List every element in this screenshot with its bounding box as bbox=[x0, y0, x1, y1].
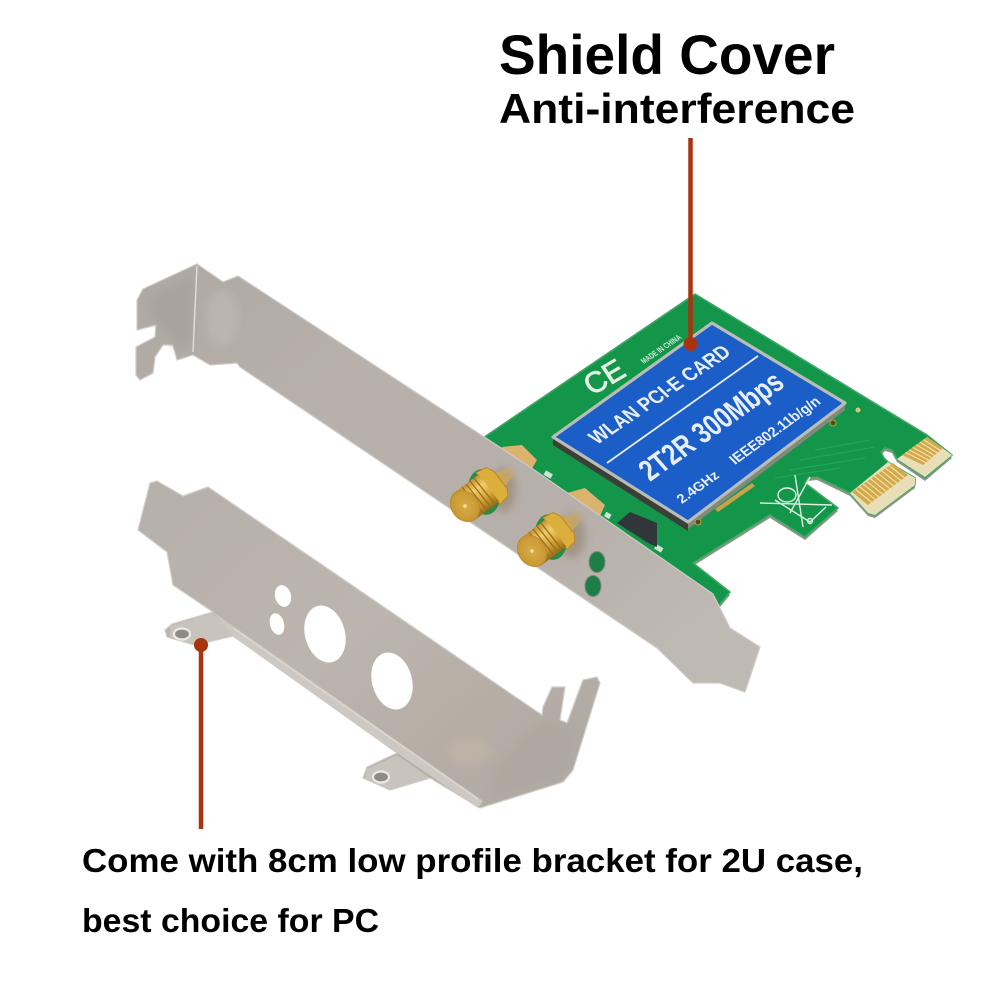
cover text: IEEE802.11b/g/n bbox=[726, 394, 824, 468]
leader line bbox=[199, 645, 203, 829]
PCIe wireless card bbox=[480, 294, 952, 613]
leader line bbox=[688, 138, 693, 344]
antenna cut-outs bbox=[464, 467, 571, 562]
full-height bracket bbox=[136, 264, 760, 692]
CE mark: CE bbox=[578, 353, 632, 402]
bottom fold strip bbox=[213, 612, 483, 808]
leader dot bbox=[684, 337, 698, 351]
gold contact fingers bbox=[850, 437, 952, 515]
black component bbox=[617, 512, 657, 547]
low profile plate bbox=[138, 481, 600, 808]
LED holes bbox=[585, 552, 605, 596]
green circuit board bbox=[480, 294, 952, 610]
subheading: Anti-interference bbox=[499, 85, 855, 132]
board details bbox=[544, 408, 860, 553]
leader dot bbox=[194, 638, 208, 652]
low profile bracket bbox=[138, 481, 600, 808]
bracket holes bbox=[267, 583, 419, 714]
cover text bbox=[584, 341, 824, 506]
cover text: 2T2R 300Mbps bbox=[632, 365, 791, 487]
connector shadows bbox=[490, 468, 585, 558]
gold edge strip bbox=[715, 483, 755, 512]
heading: Shield Cover bbox=[499, 23, 835, 86]
bracket plate bbox=[136, 264, 760, 692]
fold highlight bbox=[233, 628, 478, 799]
cover text: WLAN PCI-E CARD bbox=[584, 341, 736, 448]
caption line 2: best choice for PC bbox=[82, 902, 379, 939]
caption line 1: Come with 8cm low profile bracket for 2U case, bbox=[82, 842, 863, 879]
bracket flange shading bbox=[150, 266, 238, 352]
callout: low profile bracket bbox=[82, 638, 863, 939]
board edge bevel bbox=[480, 297, 952, 613]
blue shield cover bbox=[553, 323, 845, 522]
mounting ear left bbox=[170, 613, 233, 644]
cover text: 2.4GHz bbox=[673, 467, 722, 506]
crossed-out bin symbol bbox=[760, 475, 832, 527]
circuit traces bbox=[775, 440, 875, 478]
mounting screw eyes bbox=[174, 628, 389, 782]
gold tabs behind the bracket bbox=[502, 445, 605, 516]
bend glow bbox=[448, 738, 492, 766]
module side edges bbox=[553, 403, 845, 531]
mounting ear right bbox=[365, 755, 430, 789]
right flange shading bbox=[490, 720, 578, 800]
made in china: MADE IN CHINA bbox=[638, 333, 684, 365]
SMA connector 2 bbox=[509, 498, 594, 575]
cover divider bbox=[607, 356, 758, 463]
SMA connector 1 bbox=[442, 453, 527, 530]
callout: shield cover bbox=[499, 23, 855, 351]
